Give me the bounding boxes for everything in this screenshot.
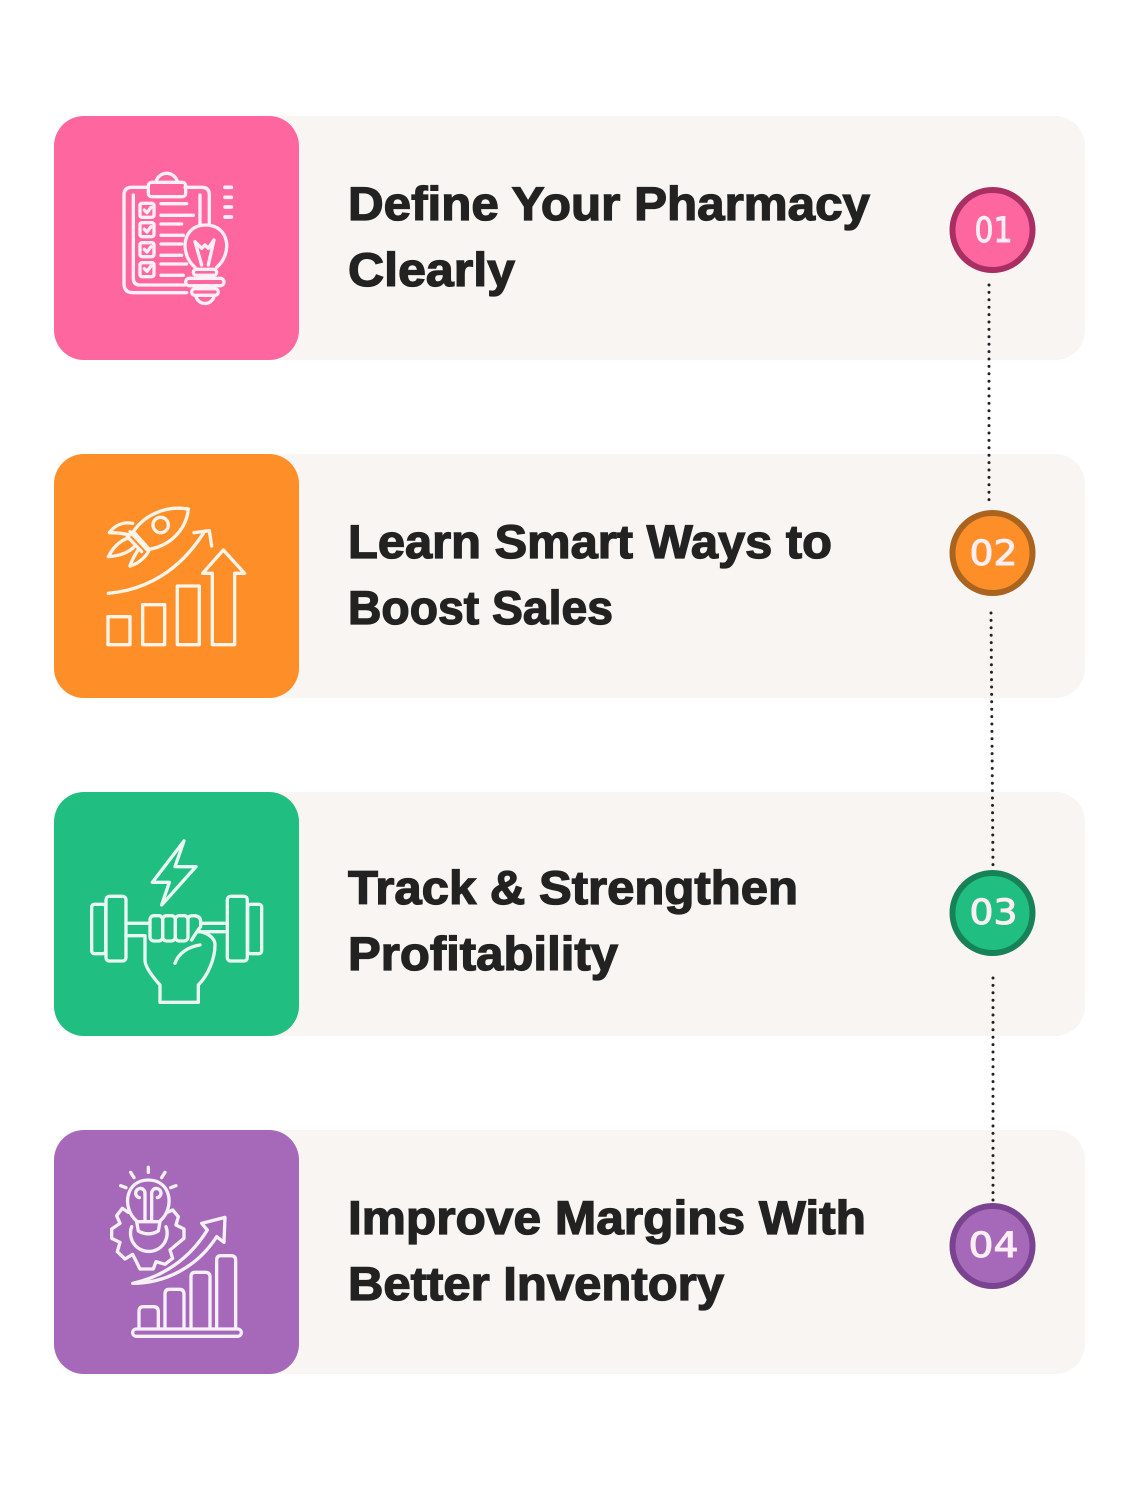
panel: step 2 <box>54 454 1085 698</box>
badge 01: 01 <box>974 211 1012 251</box>
panel: step 3 <box>54 792 1085 1036</box>
icon: dumbbell, fist and lightning <box>92 841 262 1002</box>
icon: rocket and growth chart <box>108 508 245 645</box>
heading: step 1: Define Your Pharmacy <box>348 177 870 230</box>
badge 02 <box>952 513 1032 593</box>
heading: step 2: Learn Smart Ways to <box>348 515 832 568</box>
icon tile: orange <box>54 454 299 698</box>
icon tile: pink <box>54 116 299 360</box>
heading: step 1: Clearly <box>348 243 515 296</box>
icon: clipboard and light bulb <box>124 173 231 304</box>
dotted connector 2 to 3 <box>991 613 993 868</box>
dotted connector 3 to 4 <box>992 978 994 1202</box>
heading: step 2: Boost Sales <box>348 581 613 634</box>
badge 04: 04 <box>968 1226 1018 1266</box>
badge 02: 02 <box>970 534 1018 574</box>
dotted connector 1 to 2 <box>988 285 990 504</box>
icon tile: purple <box>54 1130 299 1374</box>
badge 01 <box>952 190 1032 270</box>
icon tile: green <box>54 792 299 1036</box>
heading: step 3: Profitability <box>348 927 618 980</box>
icon: idea gear and rising bars <box>112 1167 241 1336</box>
badge 04 <box>952 1206 1032 1286</box>
heading: step 4: Improve Margins With <box>348 1191 866 1244</box>
heading: step 4: Better Inventory <box>348 1257 724 1310</box>
badge 03 <box>952 873 1032 953</box>
heading: step 3: Track & Strengthen <box>348 861 798 914</box>
panel: step 1 <box>54 116 1085 360</box>
panel: step 4 <box>54 1130 1085 1374</box>
badge 03: 03 <box>970 893 1018 933</box>
